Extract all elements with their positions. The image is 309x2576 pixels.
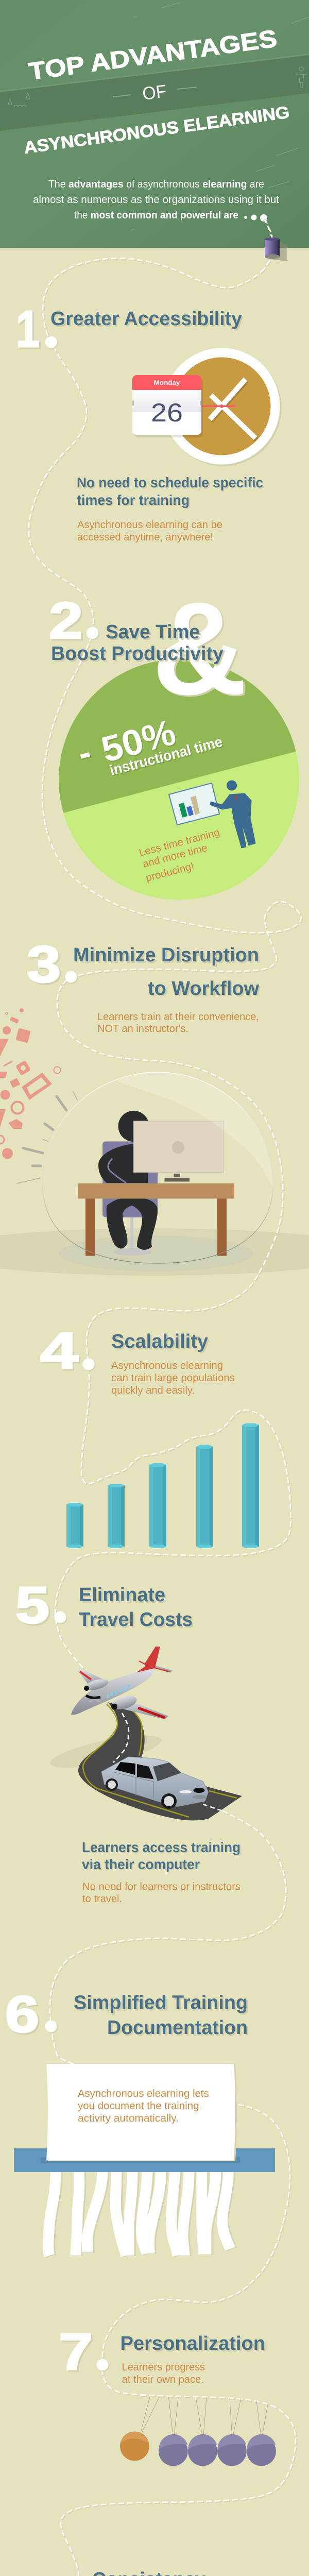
body text: quickly and easily. xyxy=(111,1385,195,1396)
number 1: 1 xyxy=(16,300,40,358)
body text: activity automatically. xyxy=(78,2113,179,2124)
section 2: save time and boost productivity xyxy=(50,602,299,900)
stat: minus 50 percent: instructional time xyxy=(108,734,224,778)
heading xyxy=(73,944,259,999)
body text: can train large populations xyxy=(111,1372,235,1384)
icon: calendar: 26 xyxy=(151,398,183,427)
number 5: 5 xyxy=(15,1577,49,1634)
heading: to Workflow xyxy=(148,978,259,999)
heading: Save Time xyxy=(106,621,200,643)
body text: Asynchronous elearning can be xyxy=(77,519,222,531)
section 7: personalization xyxy=(59,2323,276,2466)
section 6: simplified training documentation xyxy=(5,1986,275,2256)
body text xyxy=(77,519,222,543)
intro paragraph: The advantages of asynchronous elearning are xyxy=(48,179,264,190)
section 1: greater accessibility xyxy=(16,300,280,543)
ellipsis dots xyxy=(244,214,267,222)
illustration: learner at desk xyxy=(78,1111,234,1256)
body text xyxy=(122,2362,205,2385)
subheading xyxy=(77,474,263,508)
heading: Simplified Training xyxy=(74,1992,248,2013)
section 5: eliminate travel costs xyxy=(15,1577,242,1905)
header chalkboard panel xyxy=(0,0,309,248)
title xyxy=(23,24,290,157)
body text: you document the training xyxy=(78,2100,199,2112)
stat: minus 50 percent xyxy=(74,712,224,778)
heading: Travel Costs xyxy=(79,1609,193,1631)
body text xyxy=(111,1360,235,1396)
green pie circle xyxy=(53,650,309,900)
number 7: 7 xyxy=(59,2323,93,2381)
body text xyxy=(97,1011,259,1035)
heading xyxy=(74,1992,248,2039)
bell jar xyxy=(43,1072,273,1263)
section 8: consistency xyxy=(94,2572,205,2576)
intro paragraph: the most common and powerful are xyxy=(74,210,238,221)
subheading: Learners access training xyxy=(82,1839,241,1855)
subheading: No need to schedule specific xyxy=(77,474,263,490)
illustration: plane xyxy=(71,1647,173,1719)
body text: Learners progress xyxy=(122,2362,205,2373)
motion lines xyxy=(17,1092,77,1183)
number 3: 3 xyxy=(27,936,61,993)
caption xyxy=(138,827,221,884)
body text: at their own pace. xyxy=(122,2374,204,2385)
icon: clock xyxy=(164,348,280,465)
subheading: times for training xyxy=(77,492,190,508)
heading xyxy=(79,1584,193,1631)
illustration: car xyxy=(101,1757,208,1809)
caption: Less time training xyxy=(138,827,221,859)
body text: Asynchronous elearning xyxy=(111,1360,223,1371)
newton's cradle xyxy=(120,2397,276,2466)
waypoint dots xyxy=(45,336,185,2576)
ampersand: & xyxy=(152,575,247,722)
body text: NOT an instructor's. xyxy=(97,1023,188,1035)
illustration: road xyxy=(48,1702,242,1820)
title: ASYNCHRONOUS ELEARNING xyxy=(23,103,290,157)
heading: Personalization xyxy=(121,2333,265,2354)
heading: Minimize Disruption xyxy=(73,944,259,966)
heading: Scalability xyxy=(111,1331,208,1352)
intro paragraph xyxy=(33,179,279,221)
stat: minus 50 percent: - xyxy=(74,732,95,773)
heading: Eliminate xyxy=(79,1584,165,1606)
icon: presenter at chart board xyxy=(169,780,255,848)
section 4: scalability xyxy=(40,1322,259,1548)
heading: Boost Productivity xyxy=(51,643,224,665)
heading xyxy=(51,621,224,665)
intro paragraph: almost as numerous as the organizations using it but xyxy=(33,194,279,206)
icon: calendar: Monday xyxy=(153,379,180,386)
title: OF xyxy=(141,81,168,104)
section 3: minimize disruption xyxy=(0,936,273,1263)
bar chart xyxy=(66,1423,259,1548)
body text: Asynchronous elearning lets xyxy=(78,2088,209,2099)
number 6: 6 xyxy=(5,1986,39,2043)
icons: distraction swarm xyxy=(0,1008,61,1159)
caption: producing! xyxy=(145,860,195,884)
body text xyxy=(82,1882,241,1905)
ground shadow under bell jar xyxy=(0,1228,309,1276)
number 2: 2 xyxy=(49,592,83,650)
body text: Learners train at their convenience, xyxy=(97,1011,259,1023)
body text: accessed anytime, anywhere! xyxy=(77,532,213,543)
title: TOP ADVANTAGES xyxy=(27,24,279,85)
icon: chalk piece xyxy=(265,238,287,261)
body text: No need for learners or instructors xyxy=(82,1882,241,1893)
number 4: 4 xyxy=(40,1322,78,1380)
heading: Greater Accessibility xyxy=(50,308,242,330)
subheading xyxy=(82,1839,241,1872)
subheading: via their computer xyxy=(82,1856,200,1872)
heading: Documentation xyxy=(107,2017,248,2039)
body text xyxy=(78,2088,209,2124)
stat: minus 50 percent: 50% xyxy=(97,712,180,770)
body text: to travel. xyxy=(82,1893,122,1905)
shredded strips xyxy=(48,2169,230,2256)
paper sheet xyxy=(46,2064,235,2161)
icon: calendar xyxy=(132,375,203,437)
caption: and more time xyxy=(142,842,209,870)
shredder xyxy=(14,2148,275,2172)
